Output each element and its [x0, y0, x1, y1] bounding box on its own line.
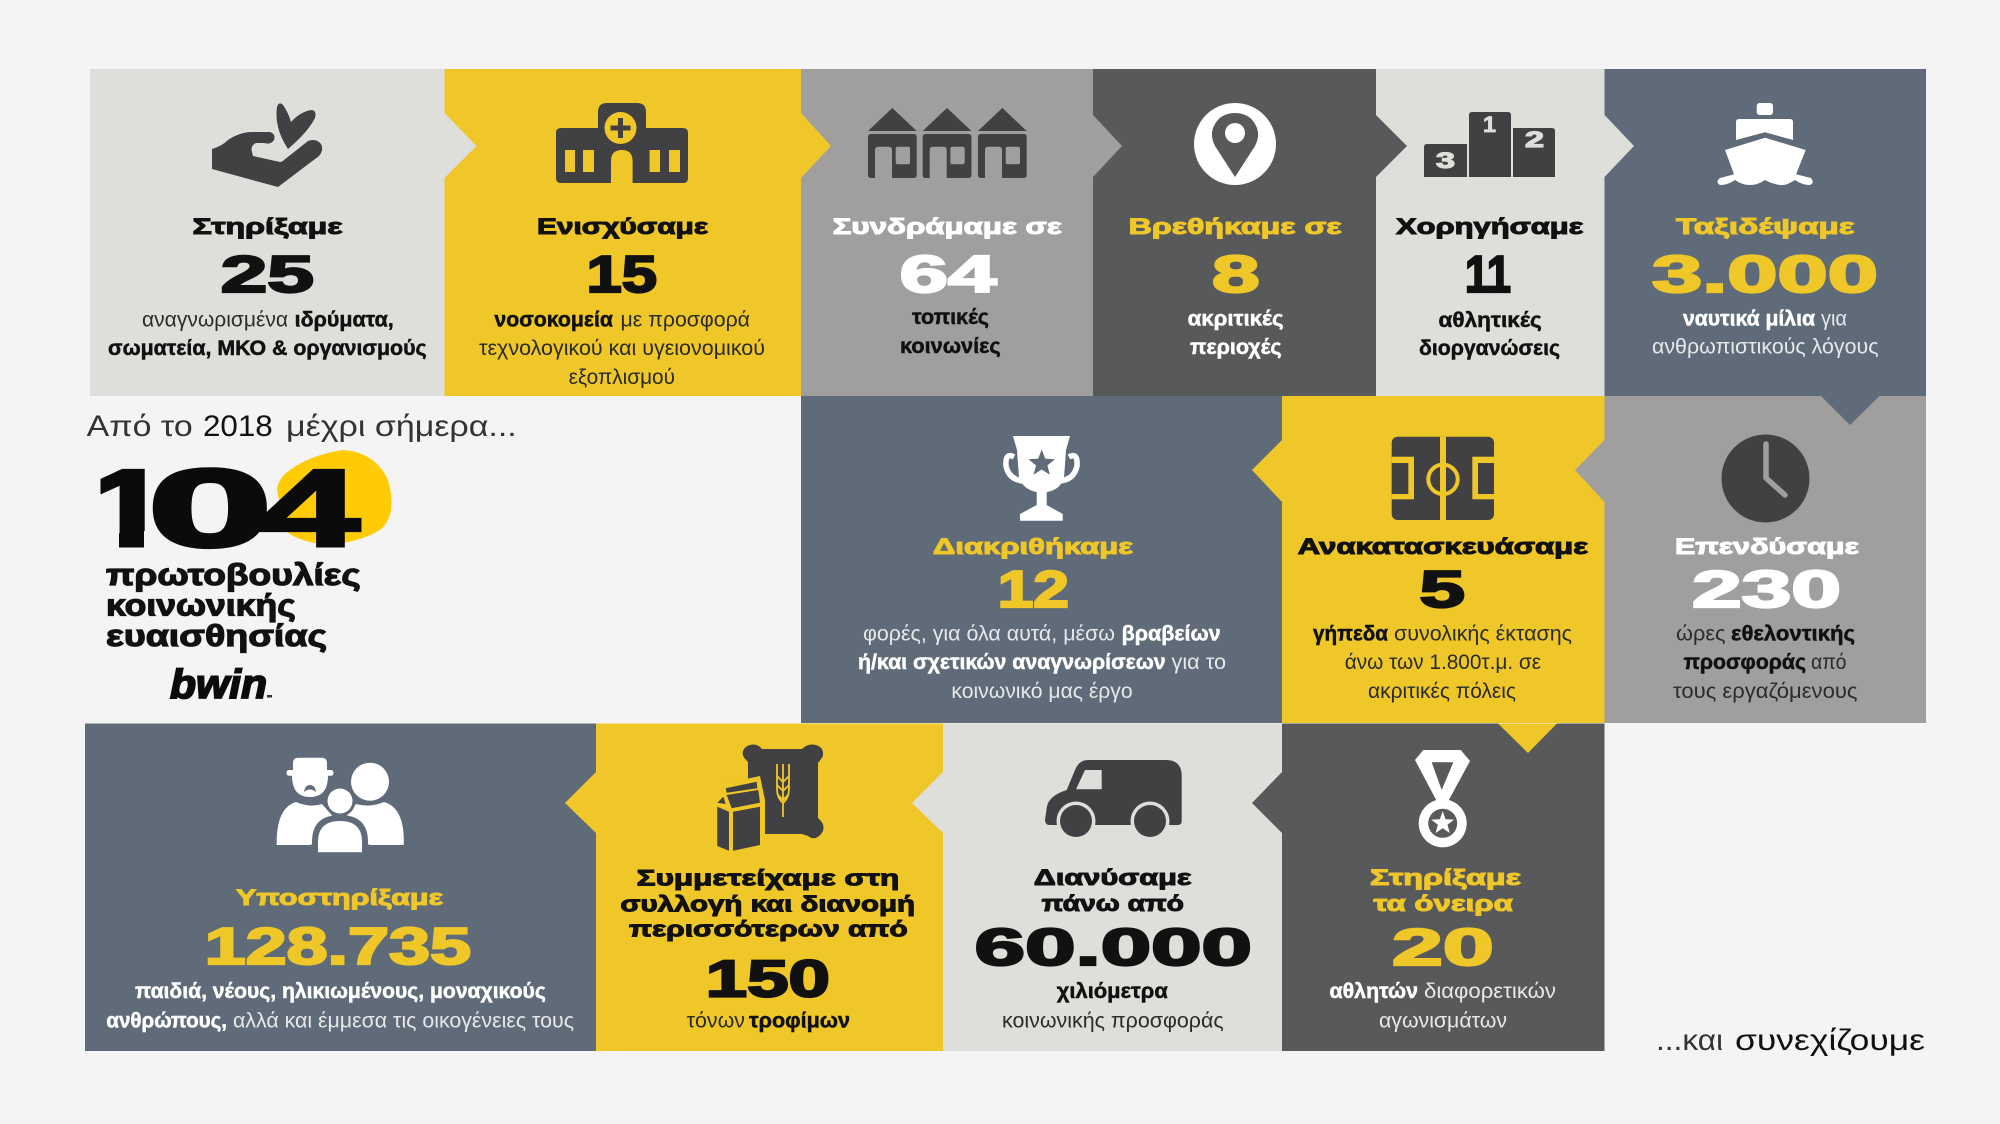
subheading: ευαισθησίας: [106, 618, 327, 653]
description: νοσοκομεία: [494, 309, 613, 332]
description: ή/και σχετικών αναγνωρίσεων: [858, 651, 1166, 674]
panel: food collection: [596, 724, 943, 1051]
heading: Ενισχύσαμε: [537, 214, 709, 239]
panel: athletes: [1282, 724, 1604, 1051]
icon: family: [277, 758, 404, 852]
description: ακριτικές: [1188, 308, 1284, 330]
heading: τα όνειρα: [1374, 891, 1513, 916]
arrow: pitches down to athletes: [1498, 724, 1557, 753]
description: ανθρωπιστικούς λόγους: [1652, 336, 1878, 358]
number: 11: [1465, 246, 1511, 304]
intro line: [87, 410, 517, 443]
description: χιλιόμετρα: [1057, 980, 1168, 1003]
description: συνολικής έκτασης: [1394, 622, 1572, 646]
description: [479, 309, 765, 389]
description: κοινωνικής προσφοράς: [1002, 1010, 1224, 1032]
heading: [620, 866, 915, 942]
panel: sports events: [1376, 69, 1605, 396]
intro line: Από το: [87, 410, 193, 443]
headline block: 104 initiatives: [84, 447, 392, 707]
intro line: 2018: [203, 410, 273, 443]
heading: Ανακατασκευάσαμε: [1298, 534, 1589, 559]
heading: Επενδύσαμε: [1675, 534, 1860, 559]
heading: [1034, 865, 1192, 916]
number: 60.000: [975, 919, 1252, 977]
heading: Βρεθήκαμε σε: [1129, 214, 1343, 239]
panel background: [1604, 396, 1926, 723]
arrow: nautical miles down to volunteering: [1821, 396, 1880, 425]
description: γήπεδα: [1313, 622, 1388, 646]
panel background: [1604, 69, 1926, 396]
arrow: hospitals to communities: [801, 113, 831, 178]
closing line: συνεχίζουμε: [1735, 1024, 1925, 1057]
heading: συλλογή και διανομή: [620, 892, 915, 917]
description: [1188, 308, 1284, 359]
number: 25: [221, 246, 314, 304]
description: ανθρώπους,: [106, 1010, 227, 1032]
intro line: μέχρι σήμερα...: [286, 410, 517, 443]
panel: local communities: [801, 69, 1093, 396]
icon: podium: 3: [1436, 148, 1455, 173]
description: αναγνωρισμένα: [142, 309, 288, 332]
icon: trophy: [1006, 436, 1077, 521]
description: [1313, 622, 1572, 703]
closing line: [1656, 1024, 1925, 1057]
description: ώρες: [1676, 622, 1726, 646]
description: παιδιά, νέους, ηλικιωμένους, μοναχικούς: [135, 980, 546, 1003]
closing line: ...και: [1656, 1024, 1723, 1057]
icon: football field: [1392, 437, 1494, 520]
description: ακριτικές πόλεις: [1368, 680, 1516, 703]
arrow: regions to sports: [1376, 115, 1407, 177]
panel background: [943, 724, 1282, 1051]
panel: kilometres: [943, 724, 1282, 1051]
icon: podium: 1: [1483, 112, 1496, 137]
icon: van: [1045, 760, 1182, 840]
arrow: sports to nautical miles: [1604, 115, 1634, 177]
description: [1673, 622, 1858, 703]
icon: hand with heart: [212, 103, 322, 187]
heading: [1370, 865, 1522, 916]
arrow: foundations to hospitals: [444, 113, 476, 178]
description: [1330, 980, 1556, 1032]
description: [1652, 308, 1878, 358]
description: για: [1821, 308, 1847, 330]
panel background: [1282, 724, 1604, 1051]
number: 8: [1212, 246, 1260, 304]
icon: location pin: [1194, 103, 1276, 185]
description: τους εργαζόμενους: [1673, 680, 1858, 703]
number: 150: [706, 951, 830, 1009]
description: άνω των 1.800τ.μ. σε: [1345, 651, 1541, 674]
description: με προσφορά: [620, 309, 750, 332]
heading: Συνδράμαμε σε: [833, 214, 1062, 239]
panel background: [1282, 396, 1604, 723]
number: 5: [1420, 561, 1465, 619]
description: σωματεία, ΜΚΟ & οργανισμούς: [108, 337, 427, 360]
heading: Υποστηρίξαμε: [236, 885, 444, 910]
arrow: communities to regions: [1093, 115, 1122, 177]
arrow: food to people: [565, 772, 596, 833]
description: από: [1811, 651, 1846, 674]
yellow blob: [277, 450, 392, 544]
heading: περισσότερων από: [629, 917, 908, 942]
logo: bwin: bwin: [170, 661, 267, 707]
panel: people supported: [85, 724, 596, 1051]
icon: food sack and milk carton: [712, 744, 824, 856]
big number: 4: [259, 447, 360, 570]
heading: πάνω από: [1042, 891, 1184, 916]
description: κοινωνικό μας έργο: [951, 680, 1133, 703]
arrow: athletes to kilometres: [1252, 772, 1282, 833]
description: αθλητών: [1330, 980, 1418, 1003]
icon: ship: [1718, 103, 1813, 185]
description: τεχνολογικού και υγειονομικού: [479, 337, 765, 360]
panel background: [1376, 69, 1605, 396]
icon: hospital: [556, 103, 688, 183]
description: [1419, 309, 1560, 360]
description: διοργανώσεις: [1419, 337, 1560, 360]
description: κοινωνίες: [900, 335, 1001, 358]
panel background: [90, 69, 445, 396]
icon: three houses: [868, 108, 1027, 178]
description: τόνων: [687, 1010, 745, 1032]
subheading: [106, 557, 361, 653]
description: προσφοράς: [1684, 651, 1806, 674]
description: [106, 980, 574, 1032]
description: αγωνισμάτων: [1379, 1010, 1507, 1032]
icon: podium: [1424, 112, 1555, 177]
number: 12: [998, 561, 1069, 619]
subheading: πρωτοβουλίες: [106, 557, 361, 592]
description: αλλά και έμμεσα τις οικογένειες τους: [233, 1010, 574, 1032]
number: 230: [1692, 561, 1841, 619]
panel: supported foundations: [90, 69, 445, 396]
number: 3.000: [1652, 246, 1878, 304]
number: 15: [586, 246, 657, 304]
icon: clock: [1722, 434, 1810, 522]
description: [1002, 980, 1224, 1032]
description: διαφορετικών: [1424, 980, 1556, 1003]
number: 64: [900, 246, 997, 304]
description: περιοχές: [1190, 336, 1282, 359]
panel: volunteering hours: [1604, 396, 1926, 723]
icon: medal: [1415, 750, 1470, 847]
description: αθλητικές: [1438, 309, 1542, 332]
icon: podium: 2: [1525, 127, 1544, 152]
description: φορές, για όλα αυτά, μέσω: [863, 622, 1115, 646]
description: ναυτικά μίλια: [1683, 308, 1815, 330]
description: [900, 306, 1001, 358]
panel background: [801, 69, 1093, 396]
panel background: [596, 724, 943, 1051]
description: εξοπλισμού: [569, 366, 675, 389]
panel: renovated pitches: [1282, 396, 1604, 723]
big number: [84, 447, 360, 570]
description: ιδρύματα,: [295, 309, 394, 332]
description: τοπικές: [912, 306, 989, 329]
heading: Στηρίξαμε: [192, 214, 343, 239]
panel background: [85, 724, 596, 1051]
description: τροφίμων: [749, 1010, 850, 1032]
description: [687, 1010, 850, 1032]
arrow: kilometres to food: [912, 772, 943, 833]
panel background: [801, 396, 1282, 723]
panel: nautical miles: [1604, 69, 1926, 396]
panel: awards: [801, 396, 1282, 723]
panel background: [1093, 69, 1376, 396]
panel background: [444, 69, 802, 396]
panel: hospitals: [444, 69, 802, 396]
big number: 1: [86, 447, 171, 570]
arrow: pitches to awards: [1252, 440, 1282, 502]
arrow: volunteering to pitches: [1575, 440, 1604, 502]
big number: 0: [148, 447, 272, 570]
heading: Συμμετείχαμε στη: [637, 866, 899, 891]
heading: Στηρίξαμε: [1370, 865, 1522, 890]
heading: Διανύσαμε: [1034, 865, 1192, 890]
heading: Χορηγήσαμε: [1396, 214, 1584, 239]
subheading: κοινωνικής: [106, 588, 296, 623]
panel: border regions: [1093, 69, 1376, 396]
description: για το: [1172, 651, 1226, 674]
description: [858, 622, 1226, 703]
number: 128.735: [205, 918, 471, 976]
number: 20: [1392, 919, 1494, 977]
description: [108, 309, 427, 360]
description: βραβείων: [1122, 622, 1221, 646]
heading: Διακριθήκαμε: [933, 534, 1134, 559]
description: εθελοντικής: [1731, 622, 1855, 646]
heading: Ταξιδέψαμε: [1676, 214, 1855, 239]
